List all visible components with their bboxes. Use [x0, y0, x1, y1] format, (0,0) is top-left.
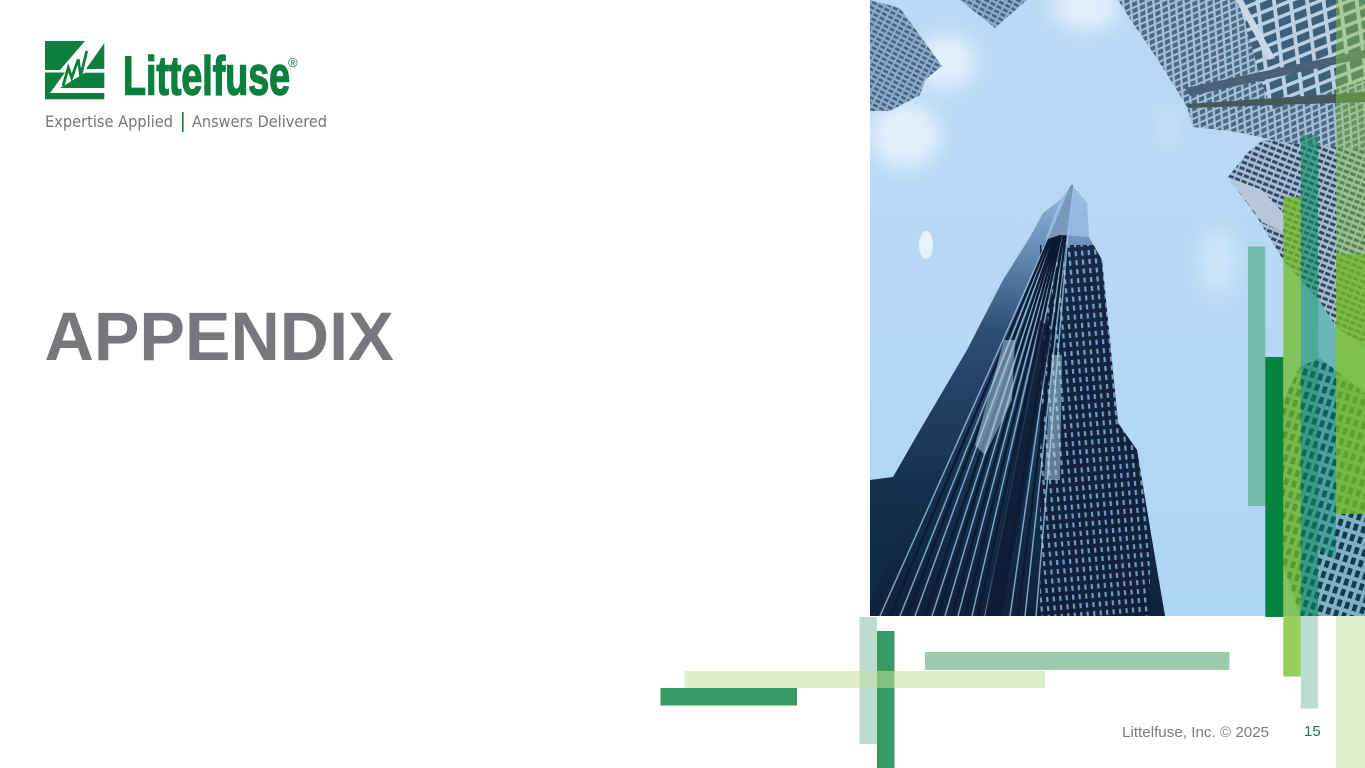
bar: light teal	[1248, 246, 1265, 506]
bar: pale lime horizontal	[684, 671, 1045, 688]
title: APPENDIX	[44, 299, 394, 375]
building: top right	[1118, 0, 1365, 150]
green overlay bars on photo	[1248, 0, 1365, 768]
bar: dark green	[1265, 357, 1283, 617]
bar: pale lime bottom right	[1336, 616, 1365, 768]
building: top left	[870, 0, 942, 111]
bar: pale lime top right	[1336, 0, 1365, 254]
footer: page number: 15	[1304, 723, 1321, 740]
registered mark: ®	[288, 55, 298, 70]
building: right middle	[1228, 140, 1365, 347]
bar: teal band on right building	[1318, 298, 1336, 560]
tagline right: Answers Delivered	[192, 112, 327, 131]
tagline divider	[182, 112, 184, 132]
icon: logo mark	[45, 41, 104, 99]
bar: strong lime right	[1336, 254, 1365, 514]
bar: mid green horizontal	[925, 652, 1230, 670]
bar: green horizontal	[660, 688, 797, 706]
building: top centre	[960, 0, 1027, 28]
tagline left: Expertise Applied	[45, 112, 173, 131]
main tower	[870, 185, 1170, 616]
bar: pale teal below photo	[1301, 616, 1318, 708]
logo: Littelfuse	[45, 41, 327, 132]
photo: skyscrapers against sky	[869, 0, 1365, 616]
bars: horizontal accents below photo	[660, 617, 1230, 768]
bar: lime	[1283, 197, 1301, 676]
bar: green vertical	[877, 631, 894, 768]
footer: copyright: Littelfuse, Inc. © 2025	[1122, 724, 1269, 741]
wordmark: Littelfuse	[123, 44, 290, 106]
building: lower right	[1283, 358, 1365, 616]
small cloud	[919, 231, 933, 259]
bar: teal on photo	[1301, 135, 1318, 616]
bar: pale teal vertical	[860, 617, 877, 744]
